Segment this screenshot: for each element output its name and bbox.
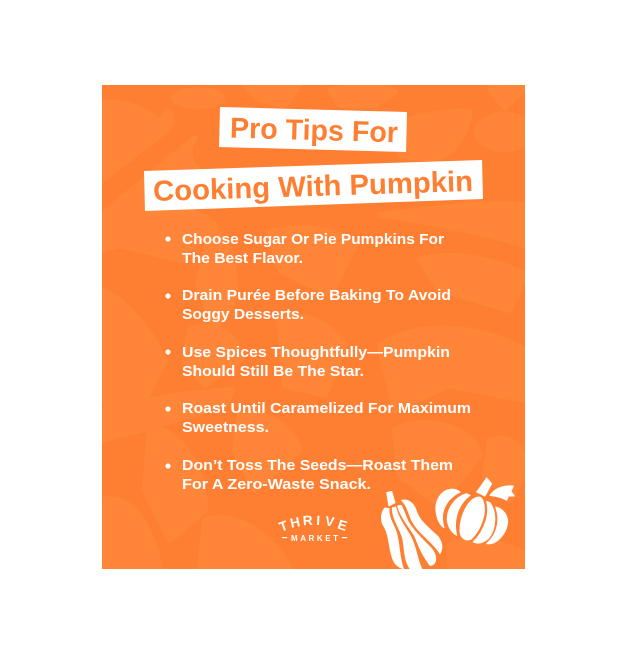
- panel: orange background: [102, 85, 533, 569]
- logo: Thrive Market: R: [302, 513, 313, 528]
- tip 4: Roast Until Caramelized For Maximum: [182, 401, 471, 417]
- heading: Pro Tips For: Pro Tips For: [230, 113, 398, 149]
- heading: Cooking With Pumpkin: Cooking With Pumpkin: [153, 166, 473, 208]
- tip 1: The Best Flavor.: [182, 251, 303, 267]
- tip 1: [165, 232, 444, 267]
- tip 5: Don’t Toss The Seeds—Roast Them: [182, 458, 453, 474]
- logo: Thrive Market: E: [336, 517, 349, 534]
- tip 4: [165, 401, 471, 436]
- tip 5: For A Zero-Waste Snack.: [182, 477, 371, 493]
- tip 2: Drain Purée Before Baking To Avoid: [182, 288, 451, 304]
- logo: Thrive Market: I: [316, 513, 321, 528]
- tip 3: Use Spices Thoughtfully—Pumpkin: [182, 345, 450, 361]
- tip 2: Soggy Desserts.: [182, 307, 304, 323]
- icon: gourd: [382, 491, 442, 569]
- tip 4: Sweetness.: [182, 420, 269, 436]
- logo: Thrive Market: [277, 513, 349, 543]
- logo: Thrive Market: MARKET: [291, 534, 338, 543]
- infographic: [102, 85, 525, 569]
- logo: Thrive Market: H: [289, 514, 301, 531]
- tip 2: [165, 288, 451, 323]
- tip 5: [165, 458, 453, 493]
- logo: Thrive Market: V: [324, 513, 335, 530]
- icon: pumpkin: [436, 478, 514, 544]
- tip 3: [165, 345, 450, 380]
- tip list: [165, 232, 471, 493]
- tip 1: Choose Sugar Or Pie Pumpkins For: [182, 232, 444, 248]
- logo: Thrive Market: T: [277, 518, 291, 535]
- tip 3: Should Still Be The Star.: [182, 364, 364, 380]
